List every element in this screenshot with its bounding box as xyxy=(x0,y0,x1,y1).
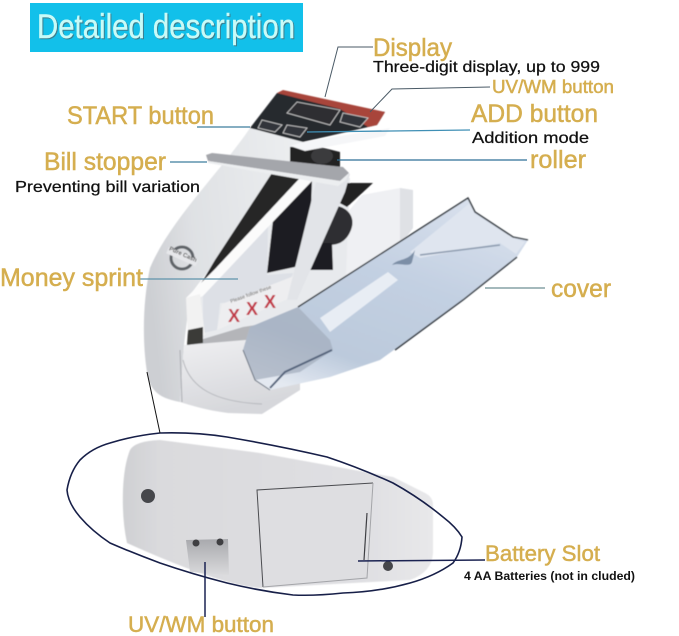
roller xyxy=(290,145,340,172)
label: batteries note: 4 AA Batteries (not in cluded) xyxy=(464,569,635,583)
label: bill stopper detail: Preventing bill variation xyxy=(15,179,200,196)
warning label: Please follow these xyxy=(230,284,272,305)
warning label: X xyxy=(264,292,276,312)
lower illustration: underside of machine xyxy=(67,433,462,595)
illustration: bill counter machine xyxy=(144,90,528,414)
white neck under panel xyxy=(290,128,390,151)
screw hole xyxy=(141,489,155,503)
warning label: X xyxy=(246,299,258,319)
machine rear housing xyxy=(300,188,413,330)
label: display detail: Three-digit display, up to 999 xyxy=(373,59,600,76)
title: Detailed description xyxy=(37,8,295,46)
display panel xyxy=(250,90,385,142)
label: roller: roller xyxy=(530,146,586,174)
interior backdrop xyxy=(190,173,350,345)
label: UV/WM button top: UV/WM button xyxy=(492,77,614,97)
warning label: X xyxy=(228,306,240,326)
label: Battery Slot: Battery Slot xyxy=(485,541,600,566)
lower hole xyxy=(383,561,393,571)
callout ellipse xyxy=(67,433,462,595)
label: Money sprint: Money sprint xyxy=(0,264,143,292)
label: Display: Display xyxy=(373,34,452,62)
machine body xyxy=(144,128,303,402)
bill stopper xyxy=(206,153,350,300)
label: START button: START button xyxy=(67,102,214,130)
base shell xyxy=(180,330,300,414)
underside body xyxy=(123,440,433,588)
dark opening strip xyxy=(196,173,300,292)
label: ADD button: ADD button xyxy=(471,100,598,128)
battery lid xyxy=(257,483,373,587)
label: Bill stopper: Bill stopper xyxy=(44,148,166,176)
tray floor xyxy=(186,318,300,345)
socket xyxy=(186,538,229,575)
logo: Pure Cash xyxy=(168,246,198,264)
inner dark panel xyxy=(267,180,312,273)
money sprint plate xyxy=(186,178,312,302)
label: addition mode: Addition mode xyxy=(472,130,589,147)
leader lines xyxy=(140,47,545,617)
label: cover: cover xyxy=(551,275,611,303)
warning label xyxy=(217,276,294,330)
title xyxy=(30,3,303,52)
title: Detailed description xyxy=(38,9,296,47)
rear dark drive xyxy=(334,183,373,207)
transparent cover xyxy=(243,198,528,390)
